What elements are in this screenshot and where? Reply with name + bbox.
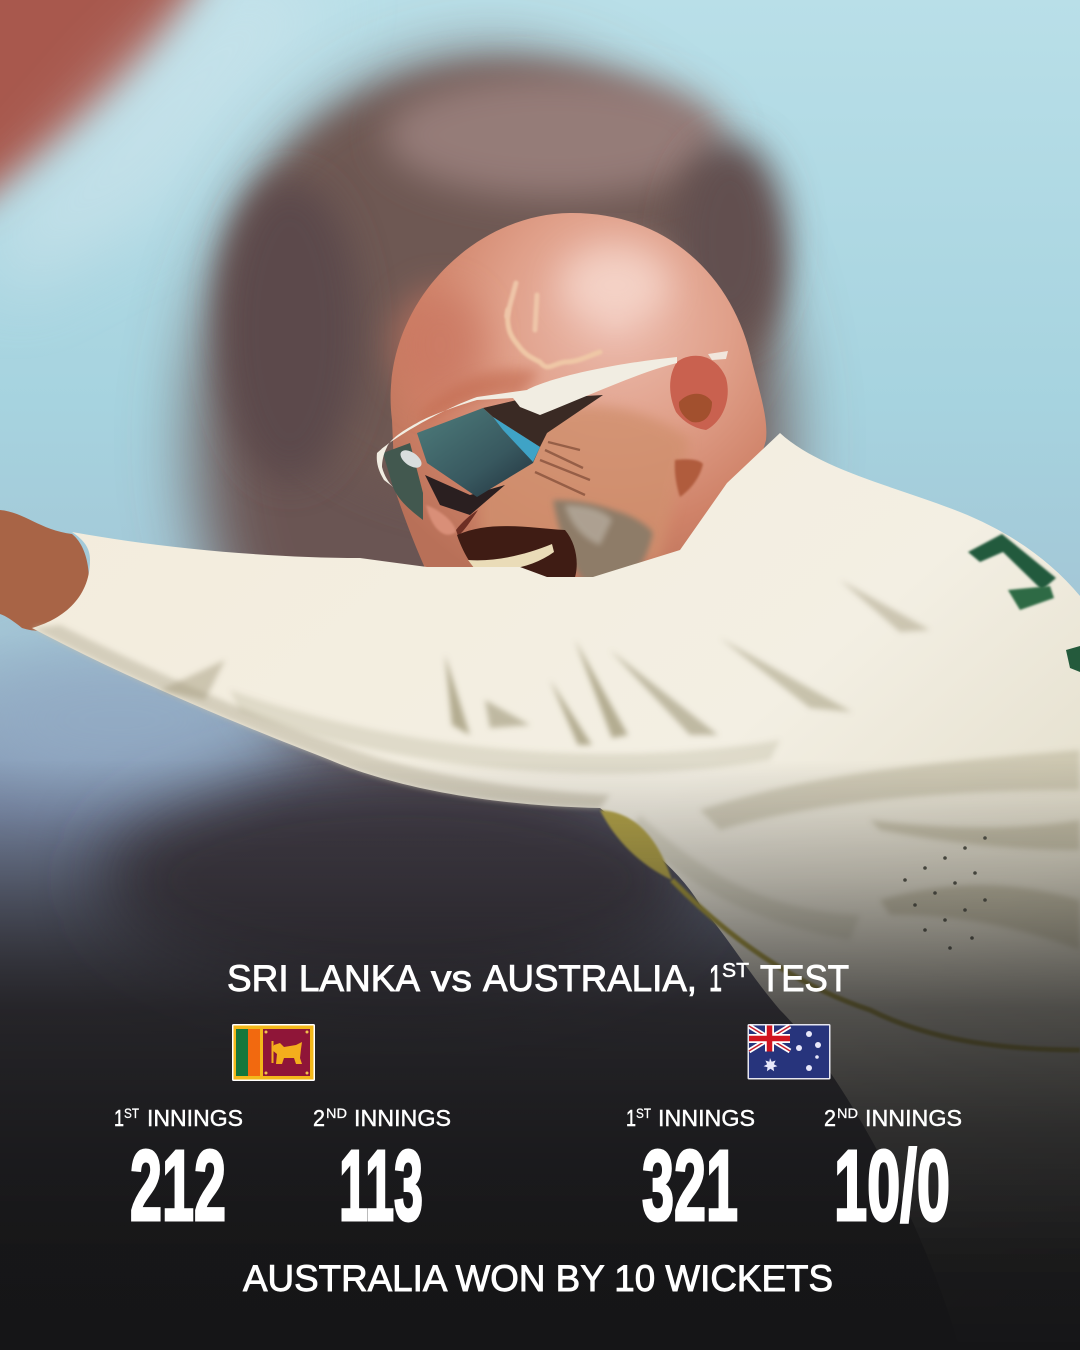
teeth <box>468 544 554 570</box>
right lens <box>417 408 540 497</box>
forehead veins <box>508 310 600 367</box>
left lens <box>383 443 423 520</box>
Sri Lanka 2nd innings: 2 <box>313 1105 325 1131</box>
Sri Lanka 1st innings: 212 <box>130 1130 226 1242</box>
hand <box>0 510 89 631</box>
nose <box>426 505 456 535</box>
perforated panel dots <box>903 836 987 950</box>
beard <box>553 500 653 585</box>
sleeve creases <box>160 580 1080 950</box>
Australia 2nd innings: INNINGS <box>865 1105 962 1131</box>
cheek shadow <box>675 459 703 497</box>
Sri Lanka 1st innings: ST <box>124 1106 139 1121</box>
skull and face <box>391 213 766 600</box>
Sri Lanka 1st innings: 1 <box>114 1105 124 1131</box>
Australia 2nd innings: 10/0 <box>834 1130 950 1242</box>
Sri Lanka 1st innings <box>114 1105 243 1242</box>
sleeve underside shading <box>32 625 610 808</box>
Australia 1st innings: 321 <box>642 1130 738 1242</box>
Australia 1st innings <box>626 1105 755 1242</box>
temple tip <box>708 351 728 360</box>
Australia 1st innings: 1 <box>626 1105 636 1131</box>
Australia 2nd innings <box>824 1105 962 1242</box>
flag: Australia <box>748 1024 830 1080</box>
blue lens strip <box>493 417 540 462</box>
Sri Lanka 2nd innings: 113 <box>339 1130 423 1242</box>
left scalp tone <box>395 290 485 400</box>
nose pad <box>397 447 425 471</box>
Australia 2nd innings: 2 <box>824 1105 836 1131</box>
match title: AUSTRALIA, <box>483 958 697 999</box>
Sri Lanka 2nd innings: ND <box>326 1106 347 1121</box>
sunglasses <box>377 351 728 520</box>
dark bottom fade <box>0 760 1080 1350</box>
Sri Lanka 1st innings: INNINGS <box>147 1105 243 1131</box>
white shirt <box>32 433 1080 1350</box>
Sri Lanka 2nd innings: INNINGS <box>354 1105 451 1131</box>
player: head <box>391 213 766 600</box>
match title: SRI LANKA <box>227 958 420 999</box>
brow shadow band <box>420 369 540 425</box>
match title: 1 <box>709 958 722 999</box>
collar / under-arm yellow trim <box>600 810 672 880</box>
white frame <box>377 357 677 487</box>
lower face tone <box>480 406 690 560</box>
Sri Lanka 2nd innings <box>313 1105 451 1242</box>
highlight on scalp <box>560 245 670 325</box>
dark frame under temple <box>483 395 603 447</box>
Australia 1st innings: INNINGS <box>658 1105 755 1131</box>
Australia 1st innings: ST <box>636 1106 651 1121</box>
flag: Sri Lanka <box>232 1024 315 1081</box>
eye shadow <box>425 475 505 515</box>
stars <box>764 1031 821 1071</box>
Australia 2nd innings: ND <box>837 1106 858 1121</box>
jersey name marks <box>968 534 1056 590</box>
union jack <box>749 1026 790 1052</box>
match title: TEST <box>760 958 849 999</box>
result line: AUSTRALIA WON BY 10 WICKETS <box>243 1258 833 1299</box>
ear <box>670 356 728 430</box>
match title: vs <box>431 958 472 999</box>
player: body and sleeve <box>0 433 1080 1350</box>
eye wrinkles <box>535 442 590 495</box>
match title: ST <box>722 960 749 982</box>
match title <box>227 958 849 999</box>
lion emblem <box>272 1042 302 1064</box>
mouth <box>457 526 577 585</box>
